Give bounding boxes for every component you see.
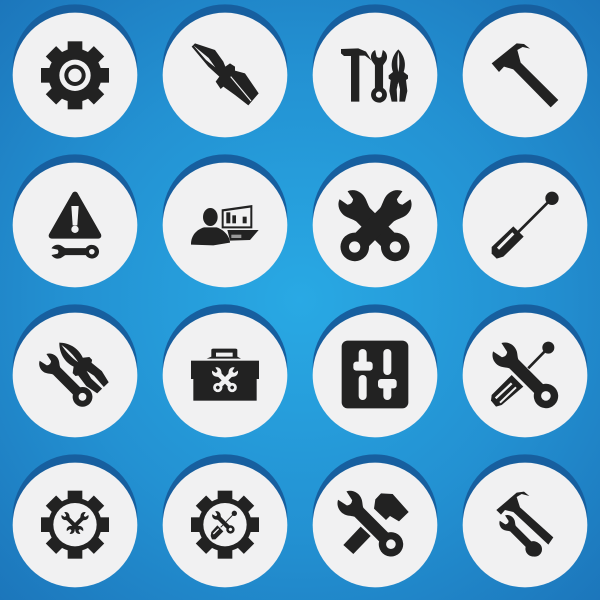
icon: gear with wrenches <box>41 491 109 559</box>
icon: hammer and wrench crossed <box>333 487 409 562</box>
badge: wrench and screwdriver <box>463 304 587 437</box>
badge: toolbox <box>163 304 287 437</box>
icon: screwdriver <box>492 192 559 259</box>
badge: wrench and pliers <box>13 304 137 437</box>
badge: screwdriver <box>463 154 587 287</box>
icon: warning triangle with wrench <box>52 195 99 259</box>
row 1 left group <box>13 4 287 137</box>
icon: pliers <box>192 43 259 105</box>
badge: warning <box>13 154 137 287</box>
row 1 right group <box>313 4 587 137</box>
row 4 right group <box>313 454 587 587</box>
badge: hammer and wrench <box>313 454 437 587</box>
badge: gear <box>13 4 137 137</box>
badge: hammer <box>463 4 587 137</box>
row 2 right group <box>313 154 587 287</box>
icon: crossed wrenches <box>333 185 417 267</box>
icon: toolbox <box>191 349 259 401</box>
row 3 left group <box>13 304 287 437</box>
icon: gear with tools <box>191 491 259 559</box>
badge: sliders <box>313 304 437 437</box>
row 3 right group <box>313 304 587 437</box>
row 2 left group <box>13 154 287 287</box>
icon: wrench and screwdriver <box>488 338 563 413</box>
badge: hammer and wrench parallel <box>463 454 587 587</box>
icon: sliders <box>342 341 408 408</box>
row 4 left group <box>13 454 287 587</box>
icon: hammer and wrench parallel <box>496 492 553 560</box>
badge: gear with tools <box>163 454 287 587</box>
icon: wrench and pliers <box>36 335 111 411</box>
badge: pliers <box>163 4 287 137</box>
icon: gear <box>41 41 109 109</box>
icon: person at monitor <box>191 205 259 245</box>
icon: hammer, wrench and pliers <box>341 48 408 103</box>
badge: tool set <box>313 4 437 137</box>
badge: gear with wrenches <box>13 454 137 587</box>
icon: hammer <box>492 43 558 107</box>
badge: analyst <box>163 154 287 287</box>
badge: crossed wrenches <box>313 154 437 287</box>
